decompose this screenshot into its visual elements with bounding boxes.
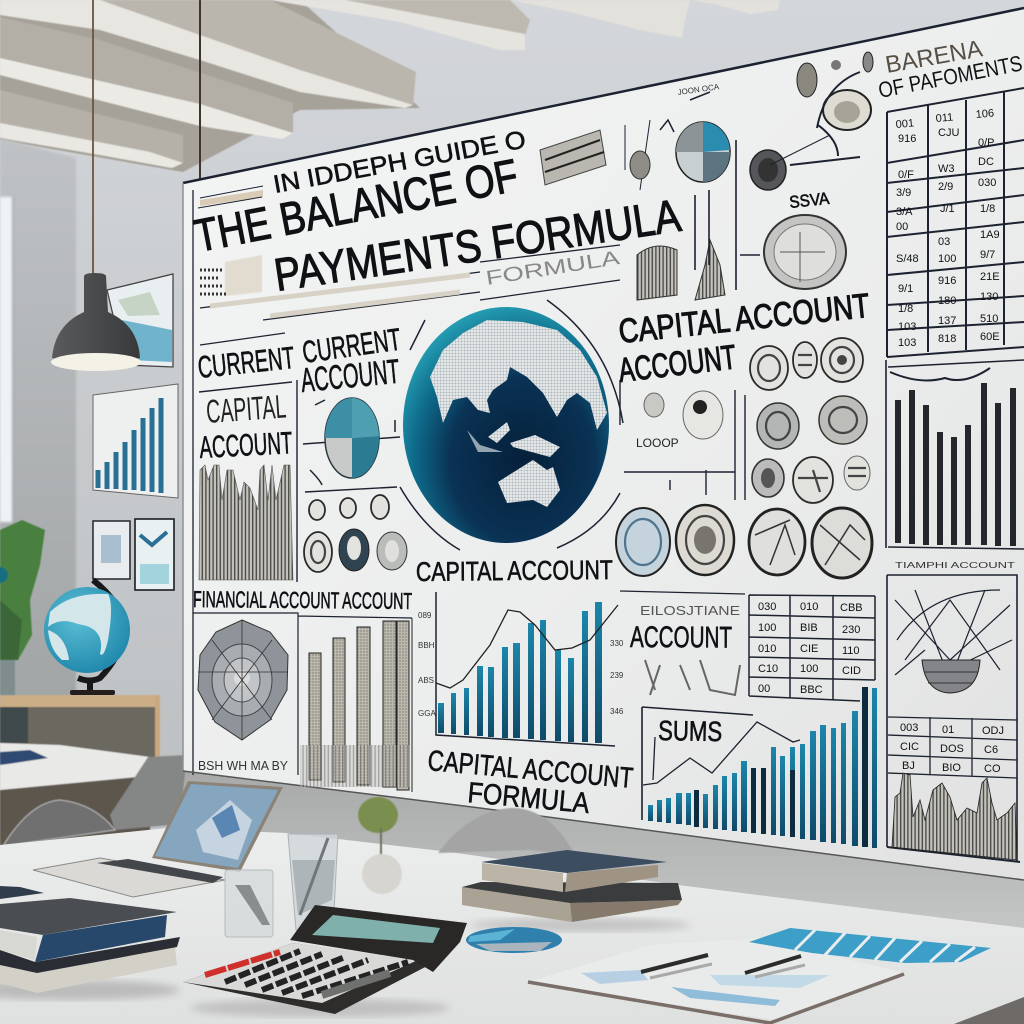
main title line two: PAYMENTS FORMULA (271, 189, 684, 301)
tablet at left edge (0, 886, 44, 899)
heading: capital account formula: FORMULA (466, 777, 591, 820)
sketch group: top centre icons (540, 52, 873, 300)
table: top right: 0/P (978, 137, 995, 149)
panel: right sketch diagram: TIAMPHI ACCOUNT (895, 561, 1015, 570)
heading: account 2: ACCOUNT (199, 425, 293, 465)
label: ssa: SSVA (788, 189, 831, 212)
chair behind desk (438, 808, 575, 855)
ceiling beams (0, 0, 780, 172)
table: small mid right (749, 595, 875, 701)
dark corner object (954, 997, 1024, 1024)
table: top right: 137 (938, 315, 956, 327)
calculator (183, 905, 467, 1017)
sketch: account scribbles (620, 591, 745, 695)
table: small mid right: 110 (842, 645, 860, 657)
table: top right: 0/F (898, 169, 914, 181)
table: lower right: DOS (940, 743, 964, 755)
table: small mid right: BBC (800, 684, 823, 696)
notebook on desk (528, 938, 904, 1023)
heading: financial account account: FINANCIAL ACCOUNT ACCOUNT (193, 586, 412, 614)
chart: capital account bars and line: 239 (610, 671, 624, 680)
chart: capital account bars and line: 330 (610, 639, 624, 648)
table: small mid right: BIB (800, 622, 818, 634)
table: top right: 916 (938, 275, 956, 287)
glasses of water (225, 834, 338, 937)
sketch group: top centre icons: JOON OCA (677, 82, 720, 97)
laptop (33, 781, 283, 897)
picture: small map (135, 519, 174, 590)
stack of books right (462, 850, 690, 932)
laptop screen (155, 784, 278, 868)
table: top right: 916 (898, 133, 916, 145)
small sketch labels: BSH WH MA BY (198, 758, 288, 773)
heading: capital account centre: CAPITAL ACCOUNT (416, 555, 613, 587)
desk globe (44, 580, 130, 695)
wall below poster (183, 771, 1024, 940)
table: small mid right: 010 (758, 643, 776, 655)
table: top right: CJU (938, 127, 959, 139)
table: top right: 180 (938, 295, 956, 307)
chart: capital account bars and line: 089 (418, 611, 432, 620)
calculator red keys (205, 952, 280, 975)
heading: capital account formula: CAPITAL ACCOUNT (426, 745, 635, 795)
table: top right: 818 (938, 333, 956, 345)
label: sums: SUMS (658, 715, 722, 747)
table: lower right: CO (984, 763, 1001, 775)
table: top right: 21E (980, 271, 1000, 283)
chart: capital account bars and line: GGA (418, 709, 436, 718)
table: small mid right: 030 (758, 601, 776, 613)
table: small mid right: C10 (758, 663, 778, 675)
table: top right: 03 (938, 236, 950, 248)
table: top right: 60E (980, 331, 1000, 343)
chart: top right black bars (888, 360, 1024, 549)
calculator screen (312, 915, 440, 943)
table: lower right: C6 (984, 744, 998, 756)
table: top right: S/48 (896, 253, 919, 265)
table: top right: DC (978, 156, 994, 168)
chart: capital account bars and line: BBH (418, 641, 435, 650)
chart: pie (325, 398, 379, 478)
table: small mid right: 100 (800, 663, 818, 675)
table: top right: 103 (898, 321, 916, 333)
stack of books left (0, 898, 180, 1000)
panel: financial account (193, 586, 412, 792)
pendant lamp (51, 0, 200, 371)
sketch: towers (637, 140, 760, 300)
table: top right: 001 (895, 117, 915, 131)
heading: capital: CAPITAL (205, 387, 287, 430)
shelf, rear desk and rear chairs (0, 695, 187, 850)
table: lower right (888, 717, 1017, 778)
chart: capital account bars and line: 346 (610, 707, 624, 716)
table: top right: 1/8 (898, 303, 913, 315)
heading: account mid: ACCOUNT (630, 621, 732, 655)
coin group: capital account icons: LOOOP (636, 436, 679, 450)
subtitle: IN IDDEPH GUIDE O (271, 126, 528, 199)
table: top right: 510 (980, 313, 998, 325)
chart: sums bars (642, 687, 877, 848)
islands (488, 422, 510, 443)
sketch icons (304, 400, 407, 572)
wall pictures (93, 274, 178, 590)
table: top right: 3/A (896, 206, 913, 218)
continent: australia (498, 460, 560, 507)
table: top right: 011 (935, 112, 954, 125)
table: top right: W3 (938, 163, 954, 175)
table: small mid right: CID (842, 665, 861, 677)
table: top right: 9/1 (898, 283, 913, 295)
sketch: account scribbles: EILOSJTIANE (640, 603, 740, 618)
table: top right: 030 (978, 177, 996, 189)
chart: radial diagram (198, 620, 288, 740)
plant and vase (358, 797, 402, 894)
chart: lower right spikes (892, 773, 1017, 860)
coin: large (764, 215, 846, 289)
sketch strip beside subtitle (198, 186, 263, 296)
heading: capital account formula (426, 745, 635, 820)
chart: gray bars (309, 621, 409, 790)
picture: bar chart (93, 384, 178, 498)
chart: capital account bars and line: ABS (418, 676, 434, 685)
table: lower right: BIO (942, 762, 961, 774)
heading: current: CURRENT (196, 340, 296, 385)
table: top right (887, 88, 1024, 357)
heading: capital account right: CAPITAL ACCOUNT (617, 287, 871, 351)
panel: right sketch diagram (886, 360, 1020, 862)
table: top right: J/1 (940, 203, 955, 215)
table: small mid right: 230 (842, 624, 860, 636)
heading: current account: CURRENT (300, 321, 403, 370)
table: top right: 1A9 (980, 229, 1000, 241)
table: top right: 3/9 (896, 187, 911, 199)
poster (183, 8, 1024, 880)
table: top right: 106 (975, 107, 995, 121)
table: top right: 9/7 (980, 249, 995, 261)
table: lower right: 01 (942, 724, 954, 736)
coin group: capital account icons (620, 338, 870, 503)
table: small mid right: CBB (840, 602, 863, 614)
continent: asia (430, 320, 607, 430)
heading: account: ACCOUNT (299, 353, 401, 400)
table: small mid right: 100 (758, 622, 776, 634)
globe (400, 300, 623, 550)
table: small mid right: 010 (800, 601, 818, 613)
left side wall and window (0, 138, 76, 760)
table: small mid right: 00 (758, 683, 770, 695)
table: lower right: BJ (902, 760, 915, 772)
table: lower right: 003 (900, 722, 918, 734)
heading: balena of payments top right: BARENA (883, 35, 985, 79)
picture: small chart (93, 521, 130, 579)
table: top right: 100 (938, 253, 956, 265)
chart: capital account bars and line (418, 592, 624, 746)
heading: capital account right (616, 287, 871, 390)
main title line one: THE BALANCE OF (190, 149, 522, 262)
table: top right: 1/8 (980, 203, 995, 215)
calculator keys (225, 951, 408, 996)
plant on shelf (0, 520, 45, 695)
table: top right: 2/9 (938, 181, 953, 193)
blue disc (466, 927, 562, 953)
heading: capital account right: ACCOUNT (616, 338, 738, 390)
table: top right: 130 (980, 291, 998, 303)
pens (641, 955, 801, 973)
blue strip chart (749, 928, 991, 963)
table: small mid right: CIE (800, 643, 818, 655)
coin row: large sketch coins (616, 505, 872, 578)
faded formula label: FORMULA (484, 247, 622, 290)
table: lower right: ODJ (982, 725, 1004, 737)
table: top right: 103 (898, 337, 916, 349)
table: top right: 00 (896, 221, 908, 233)
title block (190, 126, 684, 301)
picture: map poster (107, 274, 173, 367)
panel: left accounts (196, 321, 407, 582)
desk (0, 828, 1024, 1024)
table: lower right: CIC (900, 741, 919, 753)
chart: spiky gray bars (199, 465, 293, 580)
